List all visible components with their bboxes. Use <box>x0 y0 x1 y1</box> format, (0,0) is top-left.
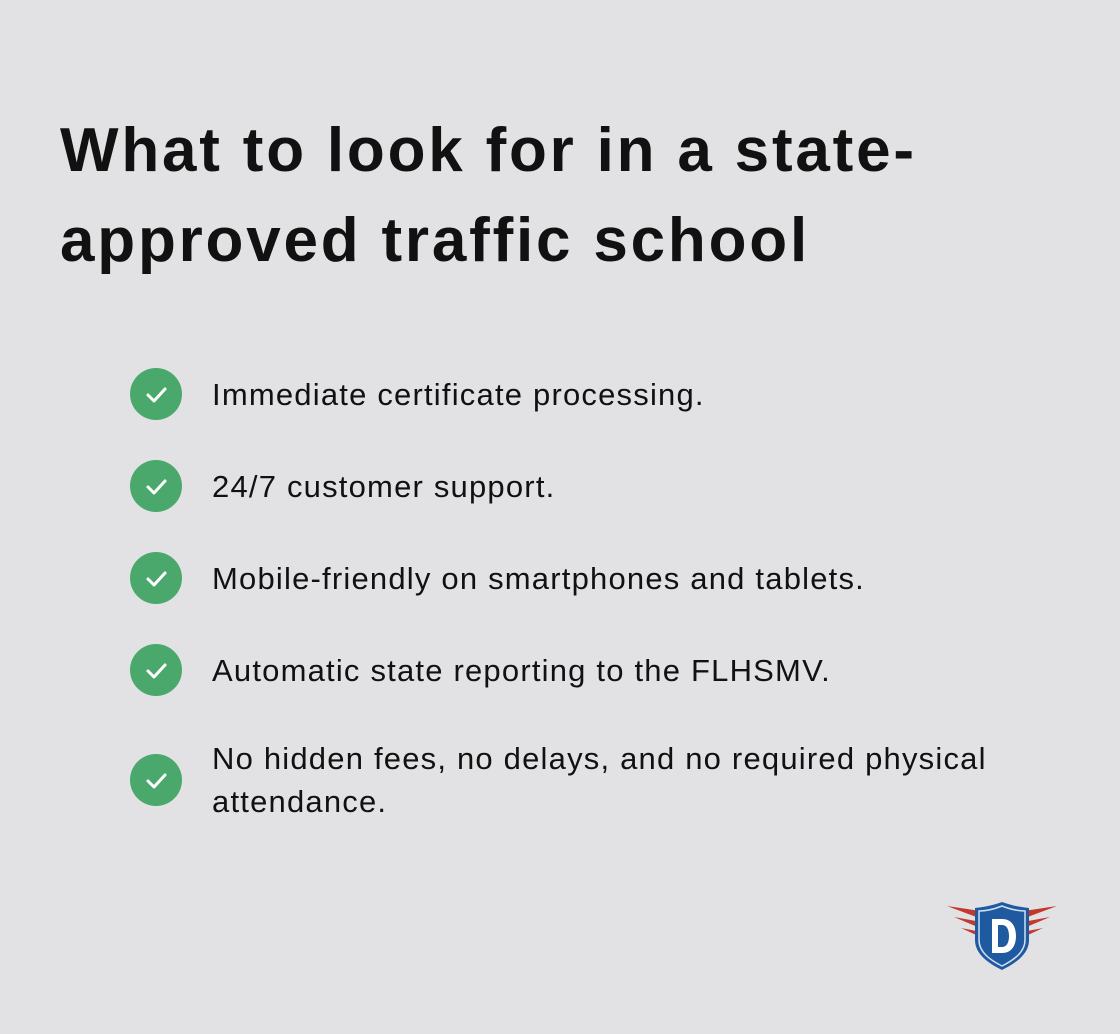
item 1 <box>130 368 705 420</box>
title: approved traffic school <box>60 206 810 275</box>
icon: check <box>130 552 182 604</box>
icon: check <box>130 460 182 512</box>
text: Mobile-friendly on smartphones and tablets. <box>212 561 865 596</box>
icon: check <box>130 754 182 806</box>
title <box>60 116 917 275</box>
item 5 <box>130 741 987 819</box>
text <box>212 741 987 819</box>
text: No hidden fees, no delays, and no required physical <box>212 741 987 776</box>
item 4 <box>130 644 831 696</box>
title: What to look for in a state- <box>60 116 917 185</box>
text: Immediate certificate processing. <box>212 377 705 412</box>
icon: check <box>130 368 182 420</box>
item 3 <box>130 552 865 604</box>
text: 24/7 customer support. <box>212 469 555 504</box>
item 2 <box>130 460 555 512</box>
text: attendance. <box>212 784 387 819</box>
icon: check <box>130 644 182 696</box>
logo <box>947 902 1057 970</box>
text: Automatic state reporting to the FLHSMV. <box>212 653 831 688</box>
